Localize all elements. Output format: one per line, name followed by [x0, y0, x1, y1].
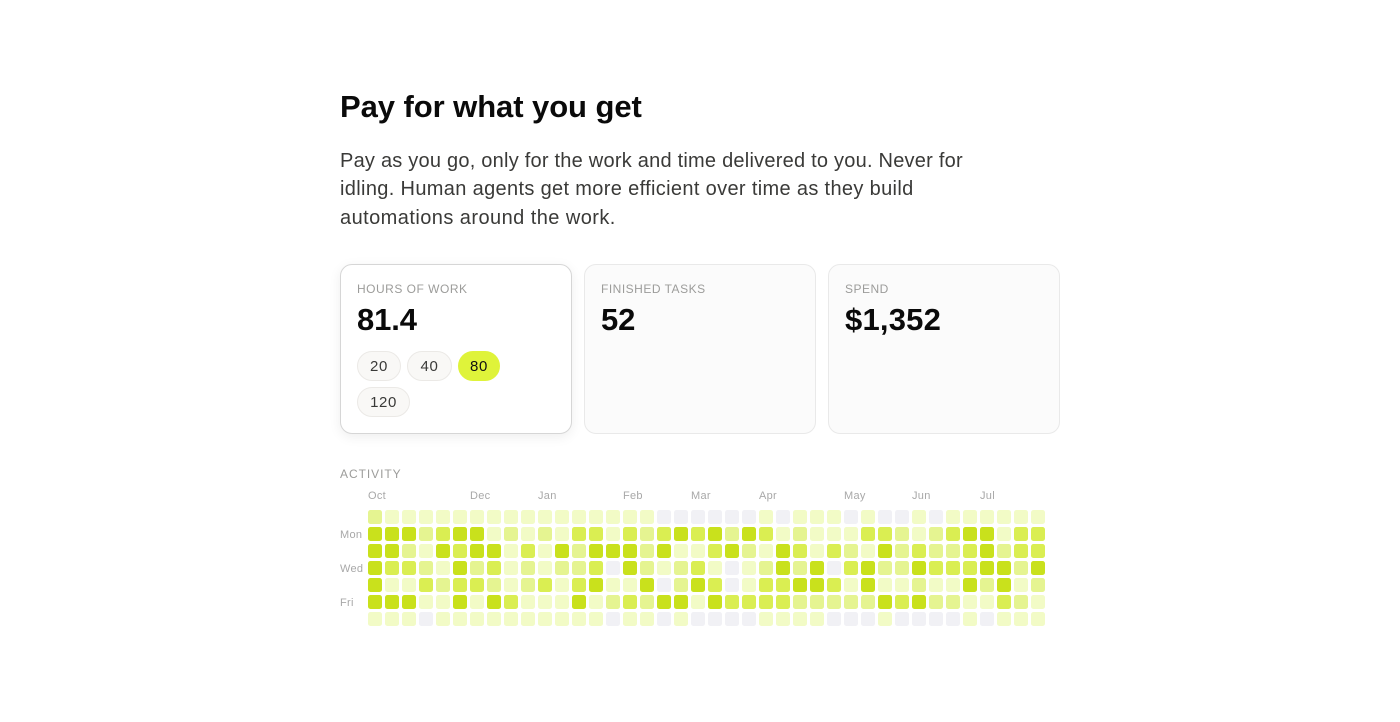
pill: 120	[357, 387, 410, 417]
value: tasks: 52	[601, 302, 635, 337]
weekday labels: Wed	[340, 563, 363, 575]
description text: idling. Human agents get more efficient over time as they build	[340, 178, 914, 200]
label: finished tasks: FINISHED TASKS	[601, 282, 706, 296]
month labels: Jun	[912, 490, 931, 502]
pill: 40: 40	[421, 358, 438, 375]
pill: 20	[357, 351, 401, 381]
month labels: Oct	[368, 490, 386, 502]
weekday labels: Fri	[340, 597, 354, 609]
description text: Pay as you go, only for the work and time delivered to you. Never for	[340, 150, 963, 172]
description text: automations around the work.	[340, 207, 616, 229]
heading: activity: ACTIVITY	[340, 467, 402, 481]
weekday labels	[340, 529, 363, 609]
month labels: May	[844, 490, 866, 502]
description text	[340, 150, 963, 229]
pill: 20: 20	[370, 358, 388, 375]
pill: 80 selected: 80	[470, 358, 488, 375]
title: Pay for what you get	[340, 89, 642, 124]
label: spend: SPEND	[845, 282, 889, 296]
pill: 120: 120	[370, 394, 397, 411]
pill: 40	[407, 351, 452, 381]
panel: finished tasks	[584, 264, 816, 434]
panel: spend	[828, 264, 1060, 434]
month labels: Jul	[980, 490, 995, 502]
weekday labels: Mon	[340, 529, 362, 541]
value: hours: 81.4	[357, 302, 417, 337]
month labels: Feb	[623, 490, 643, 502]
pill: 80 selected	[458, 351, 500, 381]
activity heatmap	[368, 510, 1045, 626]
month labels: Jan	[538, 490, 557, 502]
month labels: Mar	[691, 490, 711, 502]
label: hours of work: HOURS OF WORK	[357, 282, 468, 296]
value: spend: $1,352	[845, 302, 941, 337]
month labels	[368, 490, 995, 502]
panel: hours of work	[340, 264, 572, 434]
month labels: Apr	[759, 490, 777, 502]
month labels: Dec	[470, 490, 490, 502]
